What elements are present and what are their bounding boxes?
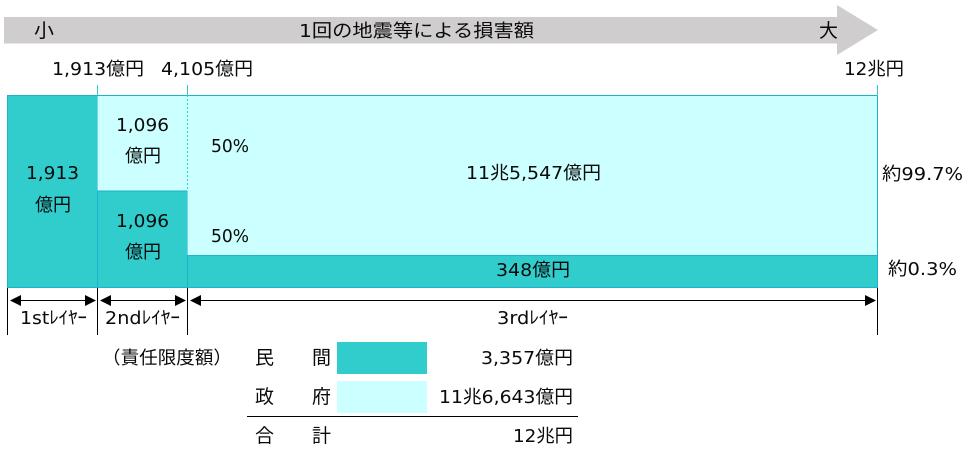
share labels: 約0.3% xyxy=(888,259,957,280)
axis amount labels: 1,913億円 xyxy=(52,59,144,80)
panel: 2nd layer private: 1,096 xyxy=(116,211,169,232)
row: private: 民 xyxy=(255,347,274,369)
layer brackets and arrows xyxy=(8,288,878,335)
panel: 2nd layer private xyxy=(98,191,188,288)
scale arrow: loss amount per earthquake xyxy=(4,5,878,55)
panel: 1st layer private xyxy=(8,96,98,288)
panel: 3rd layer government: 50% xyxy=(211,136,249,157)
panel: 1st layer private: 1,913 xyxy=(26,163,79,184)
share labels: 約99.7% xyxy=(882,164,963,185)
row: private: 3,357億円 xyxy=(481,348,573,369)
row: total xyxy=(255,425,573,447)
scale label: large: 大 xyxy=(819,20,838,42)
panel: 3rd layer government xyxy=(188,96,878,256)
layer labels: 1stﾚｲﾔｰ xyxy=(20,308,87,329)
panel: 3rd layer government: 50% xyxy=(211,226,249,247)
row: total: 合 xyxy=(255,425,274,447)
row: government: 府 xyxy=(312,386,331,408)
layer labels xyxy=(20,308,568,329)
panel: 3rd layer private xyxy=(188,256,878,288)
layer chart xyxy=(8,85,878,288)
share labels xyxy=(882,164,963,280)
layer labels: 3rdﾚｲﾔｰ xyxy=(497,308,568,329)
legend table: liability limits xyxy=(102,342,578,447)
legend table: liability limits: （責任限度額） xyxy=(102,348,232,369)
row: government xyxy=(255,381,573,413)
scale title: 1回の地震等による損害額 xyxy=(299,21,534,42)
panel: 1st layer private: 億円 xyxy=(35,195,71,216)
panel: 3rd layer private: 348億円 xyxy=(496,260,570,281)
row: total: 12兆円 xyxy=(513,426,573,447)
row: government: 政 xyxy=(255,386,274,408)
panel: 2nd layer government: 億円 xyxy=(125,146,161,167)
panel: 2nd layer government: 1,096 xyxy=(116,115,169,136)
axis amount labels: 4,105億円 xyxy=(161,59,253,80)
axis amount labels: 12兆円 xyxy=(844,59,904,80)
panel: 2nd layer government xyxy=(98,96,188,192)
row: total: 計 xyxy=(312,425,331,447)
panel: 3rd layer government: 11兆5,547億円 xyxy=(466,163,601,184)
layer labels: 2ndﾚｲﾔｰ xyxy=(105,308,180,329)
scale label: small: 小 xyxy=(34,20,54,42)
row: government: 11兆6,643億円 xyxy=(439,387,573,408)
row: private: 間 xyxy=(312,347,331,369)
row: private xyxy=(255,342,573,374)
panel: 2nd layer private: 億円 xyxy=(125,242,161,263)
axis amount labels xyxy=(52,59,904,80)
